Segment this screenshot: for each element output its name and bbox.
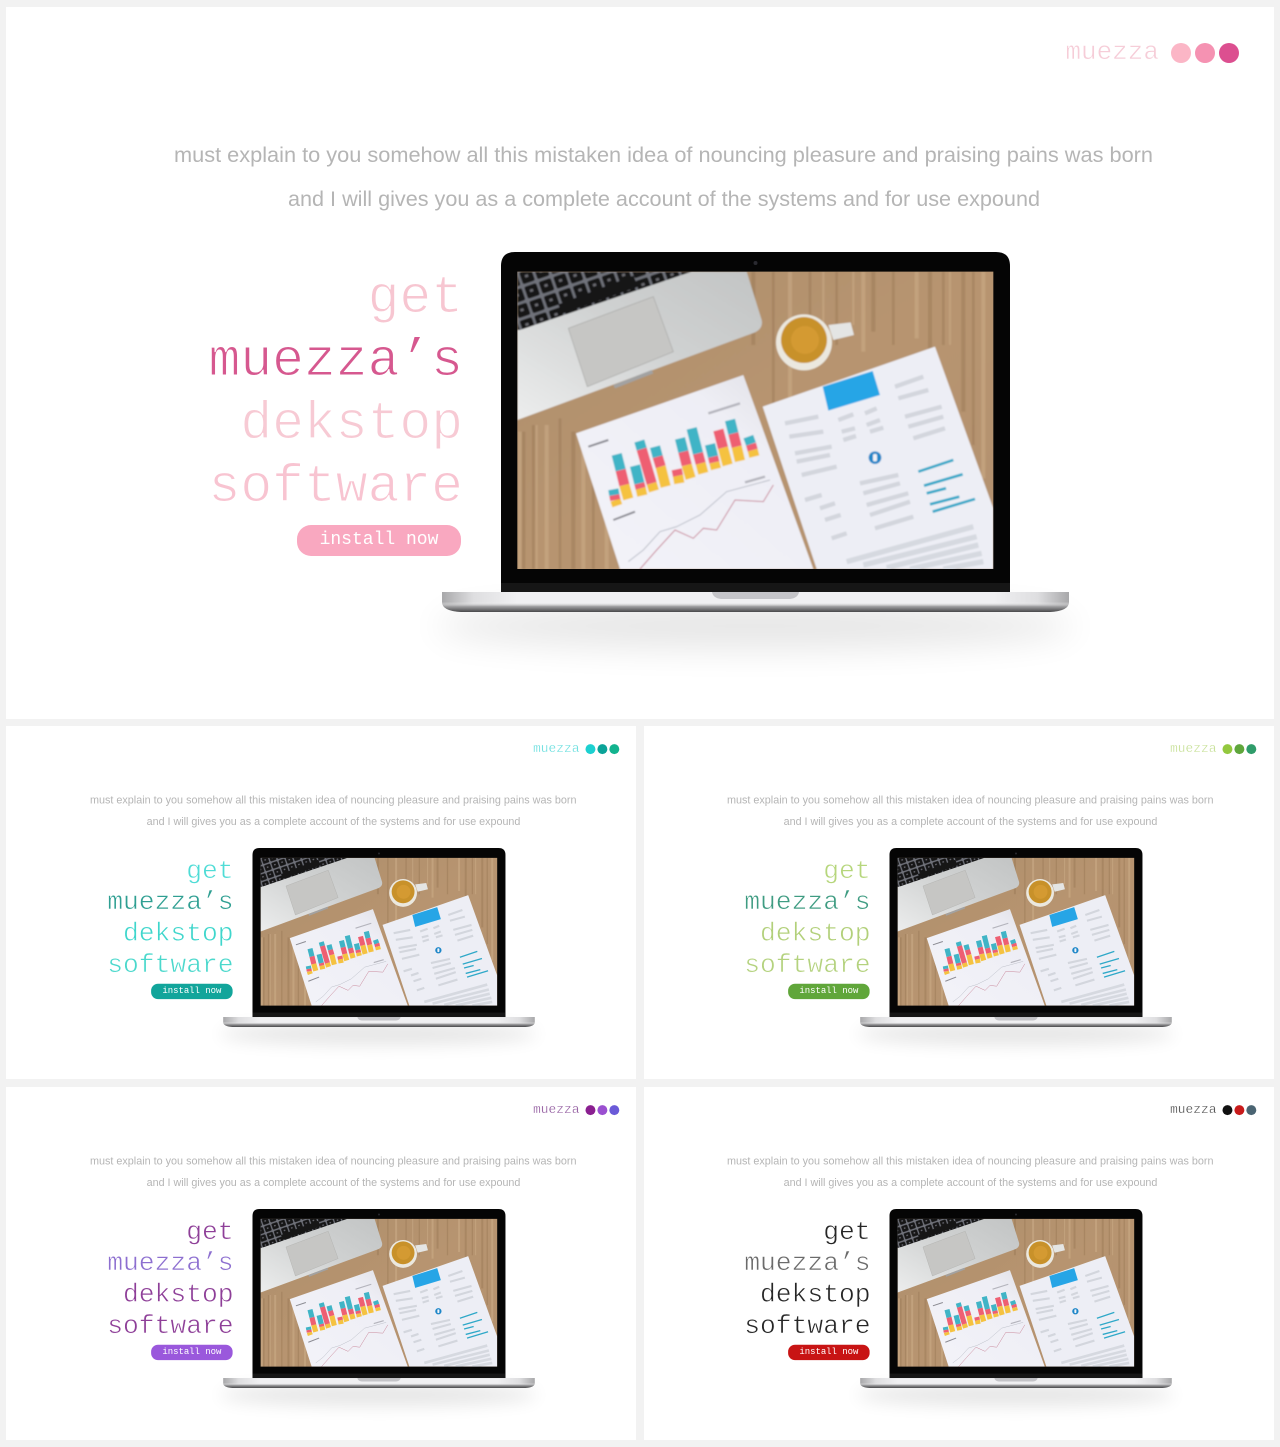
description text: must explain to you somehow all this mistaken idea of nouncing pleasure and praising pains was born	[174, 143, 1153, 167]
description text: and I will gives you as a complete account of the systems and for use expound	[147, 1177, 520, 1189]
heading: get	[823, 1217, 871, 1247]
logo dots	[1171, 43, 1239, 63]
heading	[107, 856, 234, 980]
logo: muezza: muezza	[1170, 741, 1217, 756]
panel: black and red slide	[644, 1087, 1274, 1440]
heading	[744, 856, 871, 980]
panel: large pink slide	[6, 7, 1274, 719]
description text	[727, 794, 1214, 828]
heading: dekstop	[240, 394, 463, 454]
laptop mockup	[857, 848, 1175, 1045]
heading	[107, 1217, 234, 1341]
description text: must explain to you somehow all this mistaken idea of nouncing pleasure and praising pains was born	[727, 1155, 1214, 1167]
button: install now	[788, 984, 870, 999]
description text: and I will gives you as a complete account of the systems and for use expound	[147, 816, 520, 828]
description text: and I will gives you as a complete account of the systems and for use expound	[288, 187, 1040, 211]
heading: muezza’s	[744, 887, 871, 917]
button: install now	[788, 1345, 870, 1360]
description text: must explain to you somehow all this mistaken idea of nouncing pleasure and praising pains was born	[90, 794, 577, 806]
logo dots	[585, 1105, 619, 1115]
panel: purple slide	[6, 1087, 636, 1440]
logo dots	[585, 744, 619, 754]
description text	[727, 1155, 1214, 1189]
button: install now: install now	[799, 1347, 859, 1357]
description text: must explain to you somehow all this mistaken idea of nouncing pleasure and praising pains was born	[727, 794, 1214, 806]
heading: dekstop	[123, 918, 234, 948]
heading: software	[209, 457, 463, 517]
heading: dekstop	[123, 1279, 234, 1309]
button: install now	[151, 1345, 233, 1360]
heading: get	[186, 1217, 234, 1247]
button: install now: install now	[320, 530, 439, 550]
heading: muezza’s	[744, 1248, 871, 1278]
button: install now	[297, 525, 461, 556]
heading	[744, 1217, 871, 1341]
logo: muezza: muezza	[1170, 1102, 1217, 1117]
heading: muezza’s	[209, 331, 463, 391]
logo dots	[1222, 744, 1256, 754]
panel: green slide	[644, 726, 1274, 1079]
heading: software	[744, 950, 871, 980]
description text: must explain to you somehow all this mistaken idea of nouncing pleasure and praising pains was born	[90, 1155, 577, 1167]
description text: and I will gives you as a complete account of the systems and for use expound	[784, 816, 1157, 828]
button: install now: install now	[799, 986, 859, 996]
laptop mockup	[220, 848, 538, 1045]
laptop mockup	[220, 1209, 538, 1406]
panel: teal slide	[6, 726, 636, 1079]
laptop mockup	[857, 1209, 1175, 1406]
logo: muezza: muezza	[533, 741, 580, 756]
description text	[90, 1155, 577, 1189]
heading: dekstop	[760, 1279, 871, 1309]
description text	[90, 794, 577, 828]
heading: software	[107, 1311, 234, 1341]
heading: get	[368, 268, 463, 328]
heading: software	[107, 950, 234, 980]
heading: dekstop	[760, 918, 871, 948]
heading: software	[744, 1311, 871, 1341]
logo dots	[1222, 1105, 1256, 1115]
laptop mockup	[435, 252, 1075, 648]
logo: muezza: muezza	[533, 1102, 580, 1117]
button: install now: install now	[162, 1347, 222, 1357]
description text	[174, 143, 1153, 211]
heading: get	[186, 856, 234, 886]
button: install now: install now	[162, 986, 222, 996]
heading: muezza’s	[107, 887, 234, 917]
heading: get	[823, 856, 871, 886]
heading	[209, 268, 463, 517]
description text: and I will gives you as a complete account of the systems and for use expound	[784, 1177, 1157, 1189]
heading: muezza’s	[107, 1248, 234, 1278]
logo: muezza: muezza	[1065, 37, 1159, 67]
button: install now	[151, 984, 233, 999]
